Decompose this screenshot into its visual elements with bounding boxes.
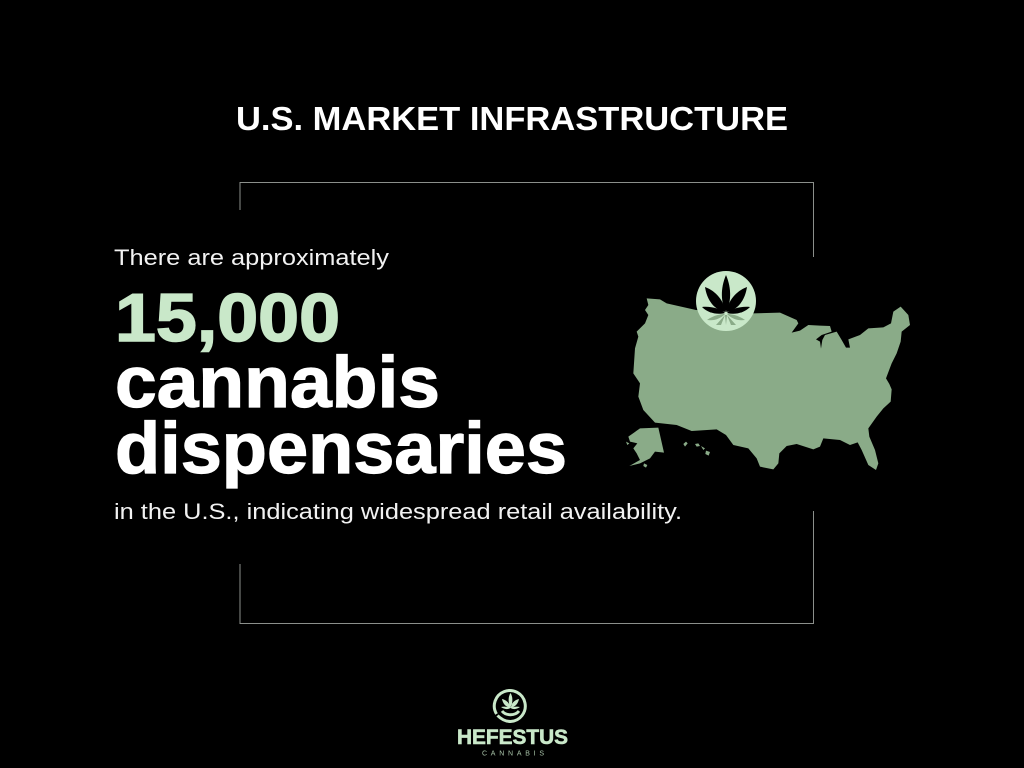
supporting text: in the U.S., indicating widespread retail availability. [114,499,682,524]
decorative frame [240,182,814,624]
headline: cannabis dispensaries [115,343,567,489]
US map [626,298,910,470]
title: U.S. MARKET INFRASTRUCTURE [236,100,788,137]
map: Alaska [626,428,664,468]
headline number: 15,000 [115,280,340,356]
logo: Hefestus Cannabis [457,691,568,758]
intro text: There are approximately [114,245,389,270]
leaf [702,275,750,314]
map: Hawaii [683,442,710,456]
logo wordmark: HEFESTUS [457,726,568,749]
icon: cannabis leaf badge [696,271,756,331]
logo icon [494,691,525,722]
leaf reflection [707,314,745,325]
headline: cannabis dispensaries: cannabis [115,343,440,423]
headline: cannabis dispensaries: dispensaries [115,409,567,489]
logo tagline: CANNABIS [482,750,544,758]
map: contiguous states [633,298,910,470]
